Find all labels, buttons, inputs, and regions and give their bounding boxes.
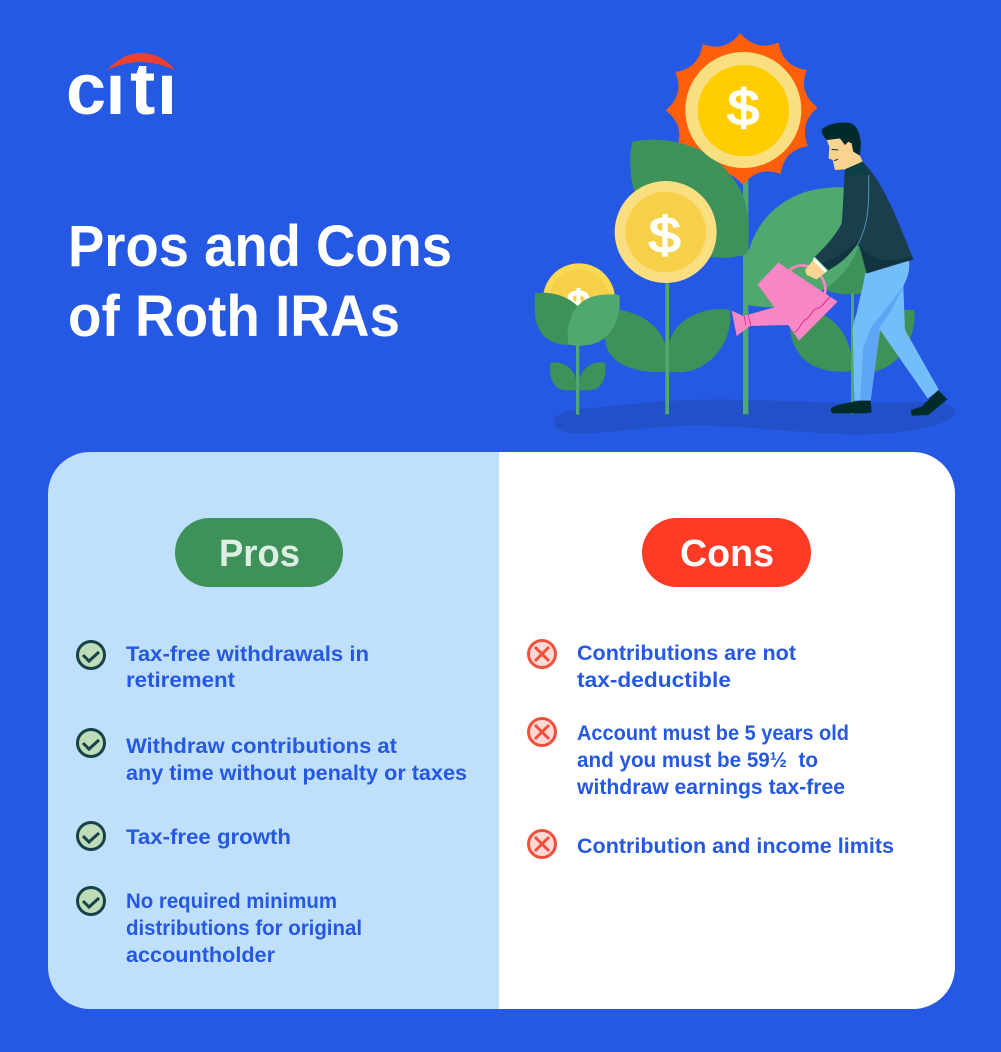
con item 2: Account must be 5 years old <box>577 722 849 745</box>
logo: citi: citi <box>66 46 177 131</box>
man <box>815 122 947 416</box>
stem: middle plant <box>665 282 669 414</box>
watering can <box>732 263 838 341</box>
pro item 2 <box>78 730 467 785</box>
logo: citi <box>68 53 175 114</box>
small plant: coin: $ <box>567 282 590 329</box>
heading: pros pill <box>175 518 343 587</box>
sun flower: coin: $ <box>727 79 759 135</box>
middle plant: coin <box>615 181 717 283</box>
pro item 1 <box>78 642 369 692</box>
pro item 2: any time without penalty or taxes <box>126 762 467 785</box>
heading: cons pill: Cons <box>680 533 774 575</box>
middle plant leaves <box>604 309 730 372</box>
pro item 2: Withdraw contributions at <box>126 735 397 758</box>
title <box>68 214 452 349</box>
stem: right plant <box>851 293 854 414</box>
sleeve shadow <box>822 237 862 270</box>
con item 1 <box>528 640 796 692</box>
heading: cons pill <box>642 518 811 587</box>
illustration: man watering money plants <box>535 33 955 434</box>
collar <box>845 162 869 178</box>
small plant: coin <box>543 263 615 335</box>
right light leaf <box>743 187 860 307</box>
stem: small plant <box>576 343 579 415</box>
con item 1: tax-deductible <box>577 669 731 692</box>
title: of Roth IRAs <box>68 284 400 349</box>
con item 2: withdraw earnings tax-free <box>576 776 845 799</box>
right lower leaves <box>790 310 914 372</box>
pro item 4: No required minimum <box>126 890 337 913</box>
pro item 4: accountholder <box>126 944 275 967</box>
panel: comparison card <box>48 452 955 1009</box>
jacket seam <box>857 175 869 245</box>
heading: pros pill: Pros <box>219 533 300 575</box>
stem: sun flower <box>743 178 748 414</box>
panel: cons background <box>499 452 955 1009</box>
hair <box>822 122 861 156</box>
sun flower: orange petals <box>666 33 818 185</box>
con item 3: Contribution and income limits <box>577 835 894 858</box>
pro item 4: distributions for original <box>126 917 362 940</box>
pro item 1: retirement <box>126 669 235 692</box>
jacket <box>815 162 913 273</box>
large dark leaf <box>630 140 749 258</box>
con item 2: and you must be 59½ to <box>577 749 818 772</box>
face <box>827 138 863 170</box>
panel: pros background <box>48 452 499 1009</box>
pro item 3 <box>78 822 291 850</box>
sun flower: coin <box>685 52 801 168</box>
con item 1: Contributions are not <box>577 642 796 665</box>
hand and cuff <box>805 257 827 279</box>
jeans <box>853 261 939 401</box>
jacket hem shadow <box>861 247 913 273</box>
jeans shadow <box>860 287 903 401</box>
pro item 3: Tax-free growth <box>126 826 291 849</box>
con item 2 <box>528 718 849 799</box>
pro item 4 <box>78 888 362 967</box>
pro item 1: Tax-free withdrawals in <box>126 643 369 666</box>
right dark leaf <box>825 243 866 294</box>
small plant leaves <box>535 293 620 390</box>
shoes <box>831 390 947 416</box>
title: Pros and Cons <box>68 214 452 279</box>
middle plant: coin: $ <box>649 207 680 263</box>
ground shadow <box>553 399 955 434</box>
